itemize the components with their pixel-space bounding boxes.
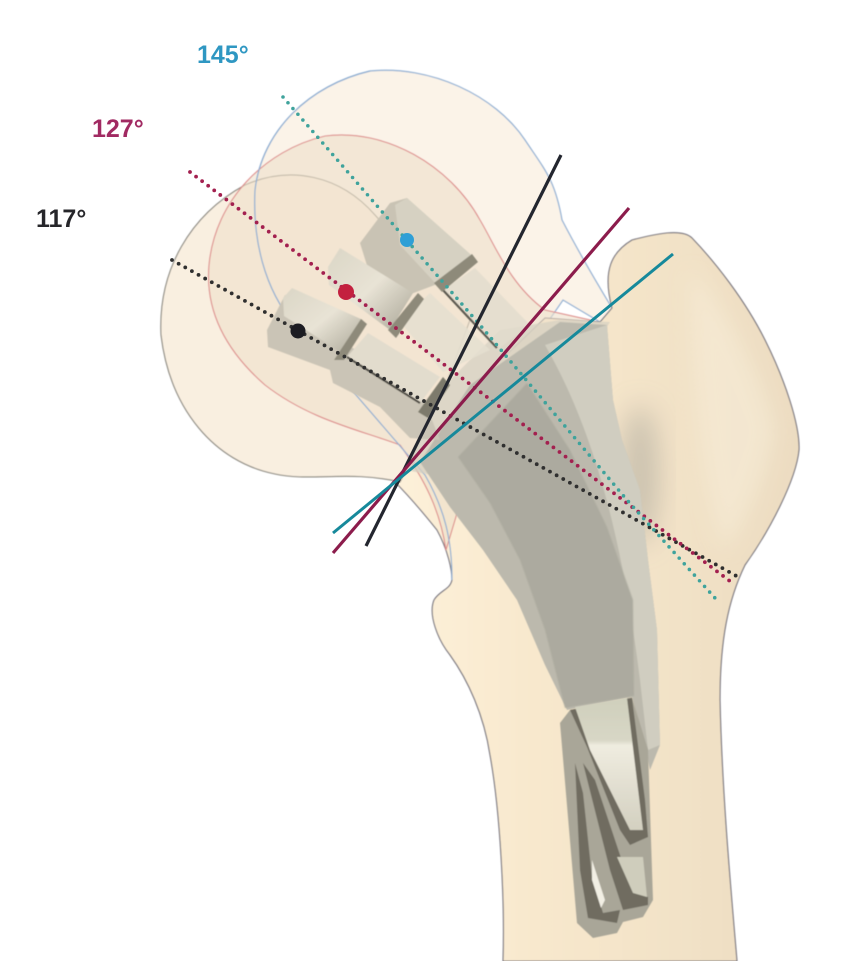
117 barrel xyxy=(283,288,363,353)
145 plate xyxy=(360,198,473,300)
117 tail band xyxy=(347,333,440,403)
127 barrel xyxy=(328,248,413,330)
head 117 degrees xyxy=(161,175,470,482)
implant wedges xyxy=(560,697,653,938)
femur body xyxy=(161,70,799,961)
head 127 degrees xyxy=(208,135,590,550)
label 117: 117° xyxy=(36,205,86,233)
145 barrel xyxy=(395,198,477,285)
stem dark core xyxy=(458,383,634,708)
stem body xyxy=(420,322,660,770)
blue outline over heads xyxy=(255,71,452,580)
trochanter highlight xyxy=(690,270,775,550)
145 tail band xyxy=(443,268,530,350)
solid line teal xyxy=(333,254,673,533)
solid line crimson xyxy=(333,208,629,553)
implant screws xyxy=(267,198,530,440)
127 tail band xyxy=(400,293,490,372)
dot: 117 xyxy=(290,324,306,338)
dotted axis 117 degrees xyxy=(172,260,740,578)
label 127: 127° xyxy=(92,115,144,143)
stem right light band xyxy=(545,325,660,750)
dot: 145 xyxy=(400,233,414,247)
dot: 127 xyxy=(338,284,354,300)
dotted axis 145 degrees xyxy=(283,97,715,598)
label 145: 145° xyxy=(197,41,249,69)
implant neck and stem xyxy=(405,320,660,770)
dotted axis 127 degrees xyxy=(190,172,735,585)
translucent neck sleeve xyxy=(405,320,610,480)
trochanter shadow xyxy=(622,405,658,545)
flanges xyxy=(434,254,478,292)
greater trochanter and shaft xyxy=(395,233,799,961)
head 145 degrees fill and outline xyxy=(255,70,612,580)
solid line black xyxy=(366,155,561,546)
117 plate xyxy=(267,295,440,440)
